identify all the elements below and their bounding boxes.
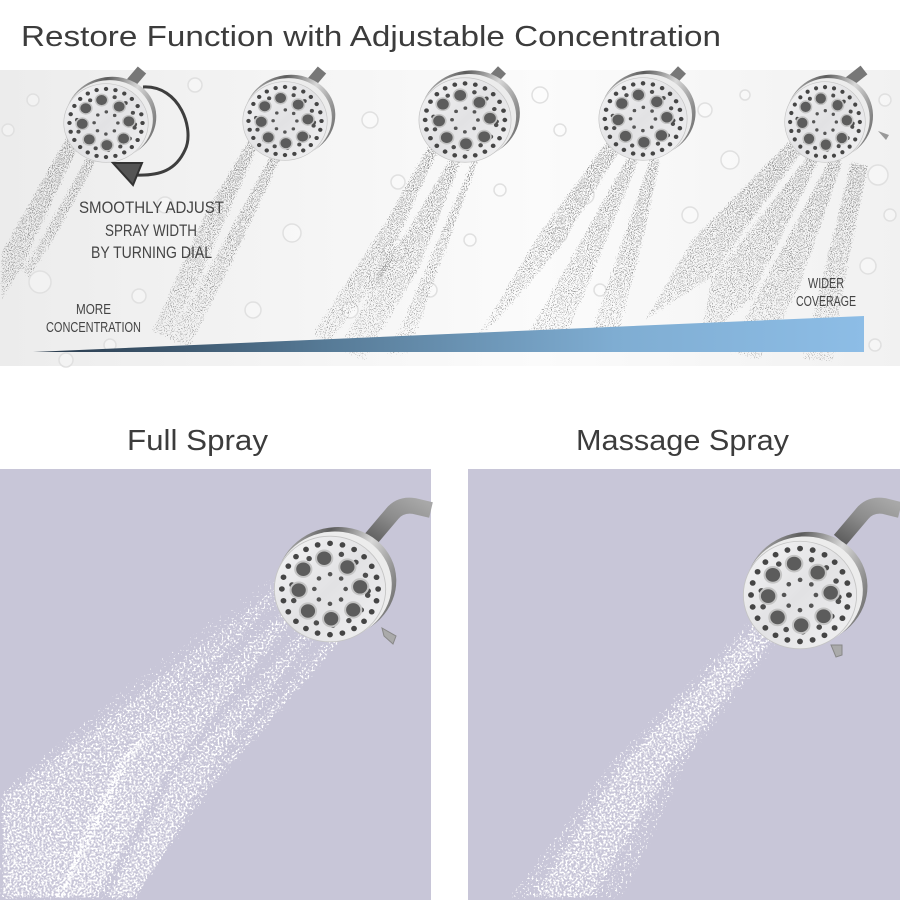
heading: massage spray: Massage Spray bbox=[576, 425, 790, 457]
label: more concentration: MORE bbox=[76, 302, 111, 318]
panel background bbox=[0, 469, 431, 900]
shower head 5 bbox=[772, 60, 889, 175]
panel: adjustable concentration bbox=[0, 56, 900, 367]
shower head bbox=[725, 513, 887, 665]
panel background bbox=[468, 469, 900, 900]
water spray bbox=[505, 612, 790, 900]
label: wider coverage: WIDER bbox=[808, 276, 844, 292]
panel: massage spray bbox=[468, 469, 900, 900]
label: wider coverage bbox=[796, 276, 856, 310]
shower head 2 bbox=[229, 61, 350, 172]
panel: full spray bbox=[0, 469, 431, 900]
icon: rotation arrow bbox=[113, 87, 188, 185]
callout: turning dial instruction: SMOOTHLY ADJUST bbox=[79, 198, 224, 217]
label: wider coverage: COVERAGE bbox=[796, 294, 856, 310]
panel background bbox=[0, 70, 900, 366]
shower heads row bbox=[50, 56, 889, 175]
shower head 3 bbox=[404, 56, 536, 175]
dial tab bbox=[382, 628, 396, 644]
dial tab bbox=[831, 645, 842, 657]
title: Restore Function with Adjustable Concentration bbox=[21, 21, 721, 53]
shower head 4 bbox=[585, 56, 711, 173]
shower arm bbox=[840, 506, 900, 540]
shower head 1 bbox=[50, 63, 171, 174]
label: more concentration bbox=[46, 302, 141, 336]
callout: turning dial instruction bbox=[79, 198, 224, 262]
label: more concentration: CONCENTRATION bbox=[46, 320, 141, 336]
shower arm bbox=[370, 506, 431, 540]
gradient wedge: concentration to coverage bbox=[33, 316, 864, 352]
water spray streams bbox=[0, 132, 870, 362]
callout: turning dial instruction: BY TURNING DIAL bbox=[91, 243, 212, 262]
water droplets background bbox=[2, 78, 896, 367]
callout: turning dial instruction: SPRAY WIDTH bbox=[105, 221, 197, 240]
shower head bbox=[256, 508, 416, 658]
water spray bbox=[0, 572, 345, 900]
heading: full spray: Full Spray bbox=[127, 425, 269, 457]
